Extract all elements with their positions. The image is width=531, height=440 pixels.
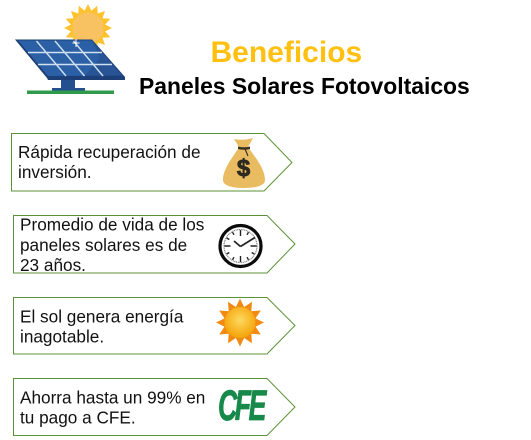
icon: CFE logo: CFE [218, 382, 267, 430]
solar panel [15, 39, 125, 80]
arrow box [12, 134, 292, 191]
icon: sun [216, 298, 264, 346]
icon: solar panel with sun [15, 4, 125, 94]
subtitle: Paneles Solares Fotovoltaicos [139, 73, 470, 99]
panel: rápida recuperación [12, 134, 292, 191]
panel: ahorro CFE [14, 378, 295, 436]
icon: money bag: $ [237, 155, 251, 182]
arrow box [14, 378, 295, 436]
text: tu pago a CFE. [20, 408, 136, 428]
text: Rápida recuperación de [18, 142, 200, 162]
panel stand [52, 80, 85, 91]
text: El sol genera energía [20, 306, 184, 326]
text: 23 años. [20, 255, 86, 275]
arrow box [14, 216, 295, 273]
icon: clock [220, 226, 261, 266]
icon: money bag [223, 138, 265, 188]
text: Promedio de vida de los [20, 214, 204, 234]
text: Ahorra hasta un 99% en [20, 388, 205, 408]
text: paneles solares es de [20, 235, 187, 255]
arrow box [14, 298, 295, 354]
ground line [27, 90, 114, 94]
text: inagotable. [20, 326, 104, 346]
sun behind panel [64, 4, 112, 52]
text: inversión. [18, 162, 92, 182]
title: Beneficios [210, 36, 362, 69]
panel: energía inagotable [14, 298, 295, 354]
panel: vida de los paneles [14, 214, 295, 275]
